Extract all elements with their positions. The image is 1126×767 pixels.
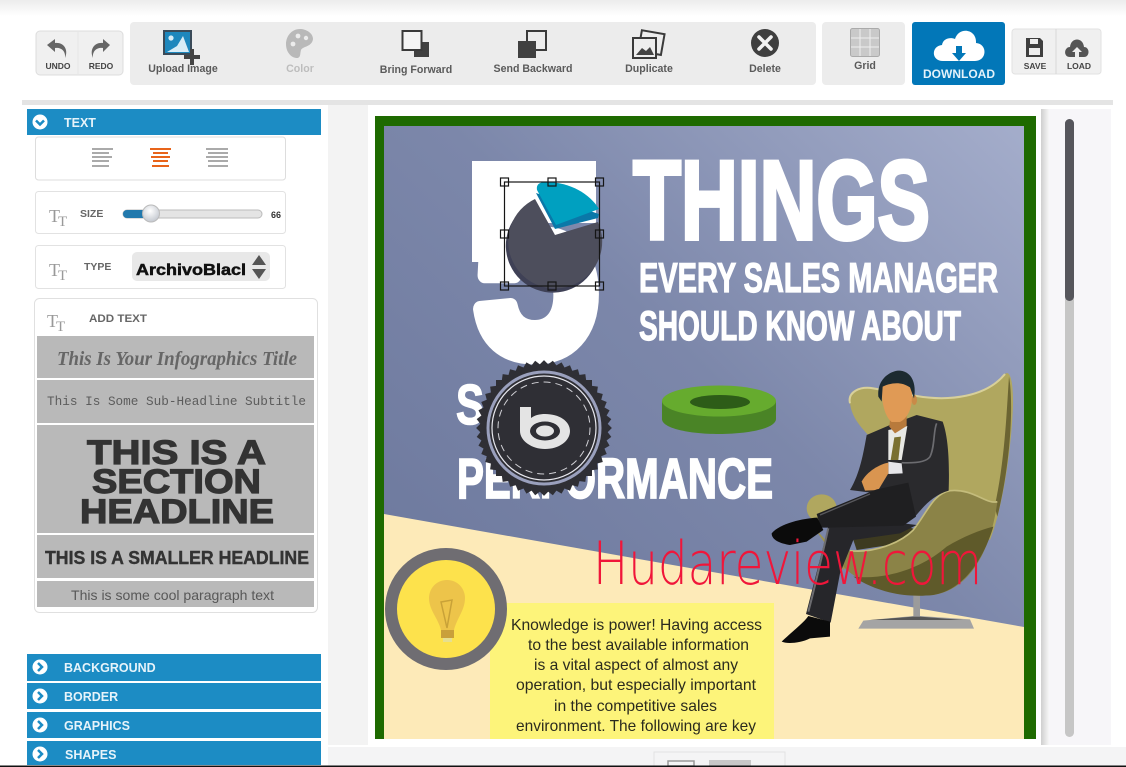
jacket [850, 415, 949, 517]
main tool panel [130, 22, 816, 85]
green ring graphic [662, 386, 776, 434]
save and load buttons: SAVE [1024, 61, 1047, 71]
section headline sample: HEADLINE [80, 493, 274, 531]
infographic canvas [368, 109, 1041, 745]
save and load buttons [1012, 29, 1101, 74]
undo and redo buttons: UNDO [45, 61, 71, 71]
graphics section header: GRAPHICS [64, 719, 130, 733]
grid tool: Grid [854, 60, 876, 72]
bring forward tool: Bring Forward [380, 64, 452, 76]
bring forward tool [380, 31, 452, 76]
scrollbar [1065, 119, 1074, 737]
border section header [27, 683, 321, 709]
shapes section header: SHAPES [65, 748, 116, 762]
toolbar [36, 22, 1101, 85]
heading fragment: S [456, 373, 484, 437]
send backward tool: Send Backward [494, 63, 572, 75]
subtitle sample: This Is Some Sub-Headline Subtitle [47, 394, 306, 409]
intro paragraph box: is a vital aspect of almost any [534, 657, 738, 674]
heading: performance: PERFORMANCE [457, 447, 773, 511]
sleeve highlight and cuff [862, 423, 937, 491]
duplicate tool [625, 30, 673, 75]
duplicate tool: Duplicate [625, 63, 673, 75]
background section header [27, 654, 321, 681]
paragraph sample [37, 581, 314, 607]
big number five: 5 [473, 117, 598, 410]
intro paragraph box: in the competitive sales [554, 698, 717, 715]
text section header [27, 109, 321, 135]
undo and redo buttons [36, 31, 123, 75]
color tool: Color [286, 63, 314, 75]
border section header: BORDER [64, 690, 118, 704]
grid tool [822, 22, 905, 85]
infographic title sample [37, 336, 314, 378]
intro paragraph box [490, 603, 774, 739]
watermark: Hudareview.com [593, 530, 982, 599]
delete tool [749, 29, 781, 75]
smaller headline sample: THIS IS A SMALLER HEADLINE [45, 548, 309, 568]
add text panel: ADD TEXT [89, 313, 147, 325]
upload image tool: Upload Image [148, 63, 218, 75]
undo and redo buttons: REDO [89, 61, 114, 71]
bottom zoom control [654, 752, 785, 766]
title: things: THINGS [633, 138, 930, 263]
add text panel [34, 298, 318, 612]
size slider panel: 66 [271, 210, 281, 220]
graphics section header [27, 712, 321, 738]
download button [912, 22, 1005, 85]
font type panel: T [58, 268, 67, 284]
alignment panel [36, 137, 286, 180]
send backward tool [494, 31, 572, 75]
color tool [286, 29, 314, 75]
pie chart graphic [506, 182, 602, 293]
green border [375, 116, 1036, 739]
font type panel: TYPE [84, 261, 111, 273]
add text panel: T [56, 319, 65, 335]
sidebar [27, 109, 321, 765]
add text panel: T [47, 311, 58, 331]
size slider panel [36, 192, 286, 234]
text section header: TEXT [64, 116, 96, 130]
size slider panel: SIZE [80, 208, 103, 220]
font type panel [36, 246, 286, 288]
download button: DOWNLOAD [923, 67, 995, 81]
shapes section header [27, 741, 321, 765]
lower leg [806, 523, 917, 623]
background section header: BACKGROUND [64, 661, 156, 675]
paragraph sample: This is some cool paragraph text [71, 587, 274, 603]
selection box with handles [500, 178, 604, 290]
badge with b logo [476, 360, 612, 496]
section headline sample: THIS IS A [87, 434, 266, 472]
section headline sample: SECTION [92, 463, 261, 501]
shirt and tie [888, 426, 907, 460]
intro paragraph box: Knowledge is power! Having access [511, 617, 762, 634]
subtitle line two: SHOULD KNOW ABOUT [639, 302, 961, 349]
intro paragraph box: operation, but especially important [516, 677, 757, 694]
blue background [384, 126, 1024, 739]
font type panel: T [49, 260, 60, 280]
smaller headline sample [37, 535, 314, 578]
cream lower band [384, 514, 1024, 739]
bulb icon [391, 554, 501, 664]
size slider panel: T [58, 214, 67, 230]
shoes [772, 518, 830, 643]
infographic title sample: This Is Your Infographics Title [57, 348, 297, 370]
businessman in egg chair [772, 371, 1013, 643]
delete tool: Delete [749, 63, 781, 75]
intro paragraph box: environment. The following are key [516, 718, 756, 735]
section headline sample [37, 425, 314, 533]
face and hair [878, 371, 917, 433]
upload image tool [148, 31, 218, 75]
save and load buttons: LOAD [1067, 61, 1091, 71]
intro paragraph box: to the best available information [528, 637, 749, 654]
font type panel: ArchivoBlacl [136, 262, 246, 279]
size slider panel: T [49, 206, 60, 226]
subtitle sample [37, 380, 314, 423]
chair [807, 373, 1013, 629]
crossed upper leg [817, 483, 916, 528]
